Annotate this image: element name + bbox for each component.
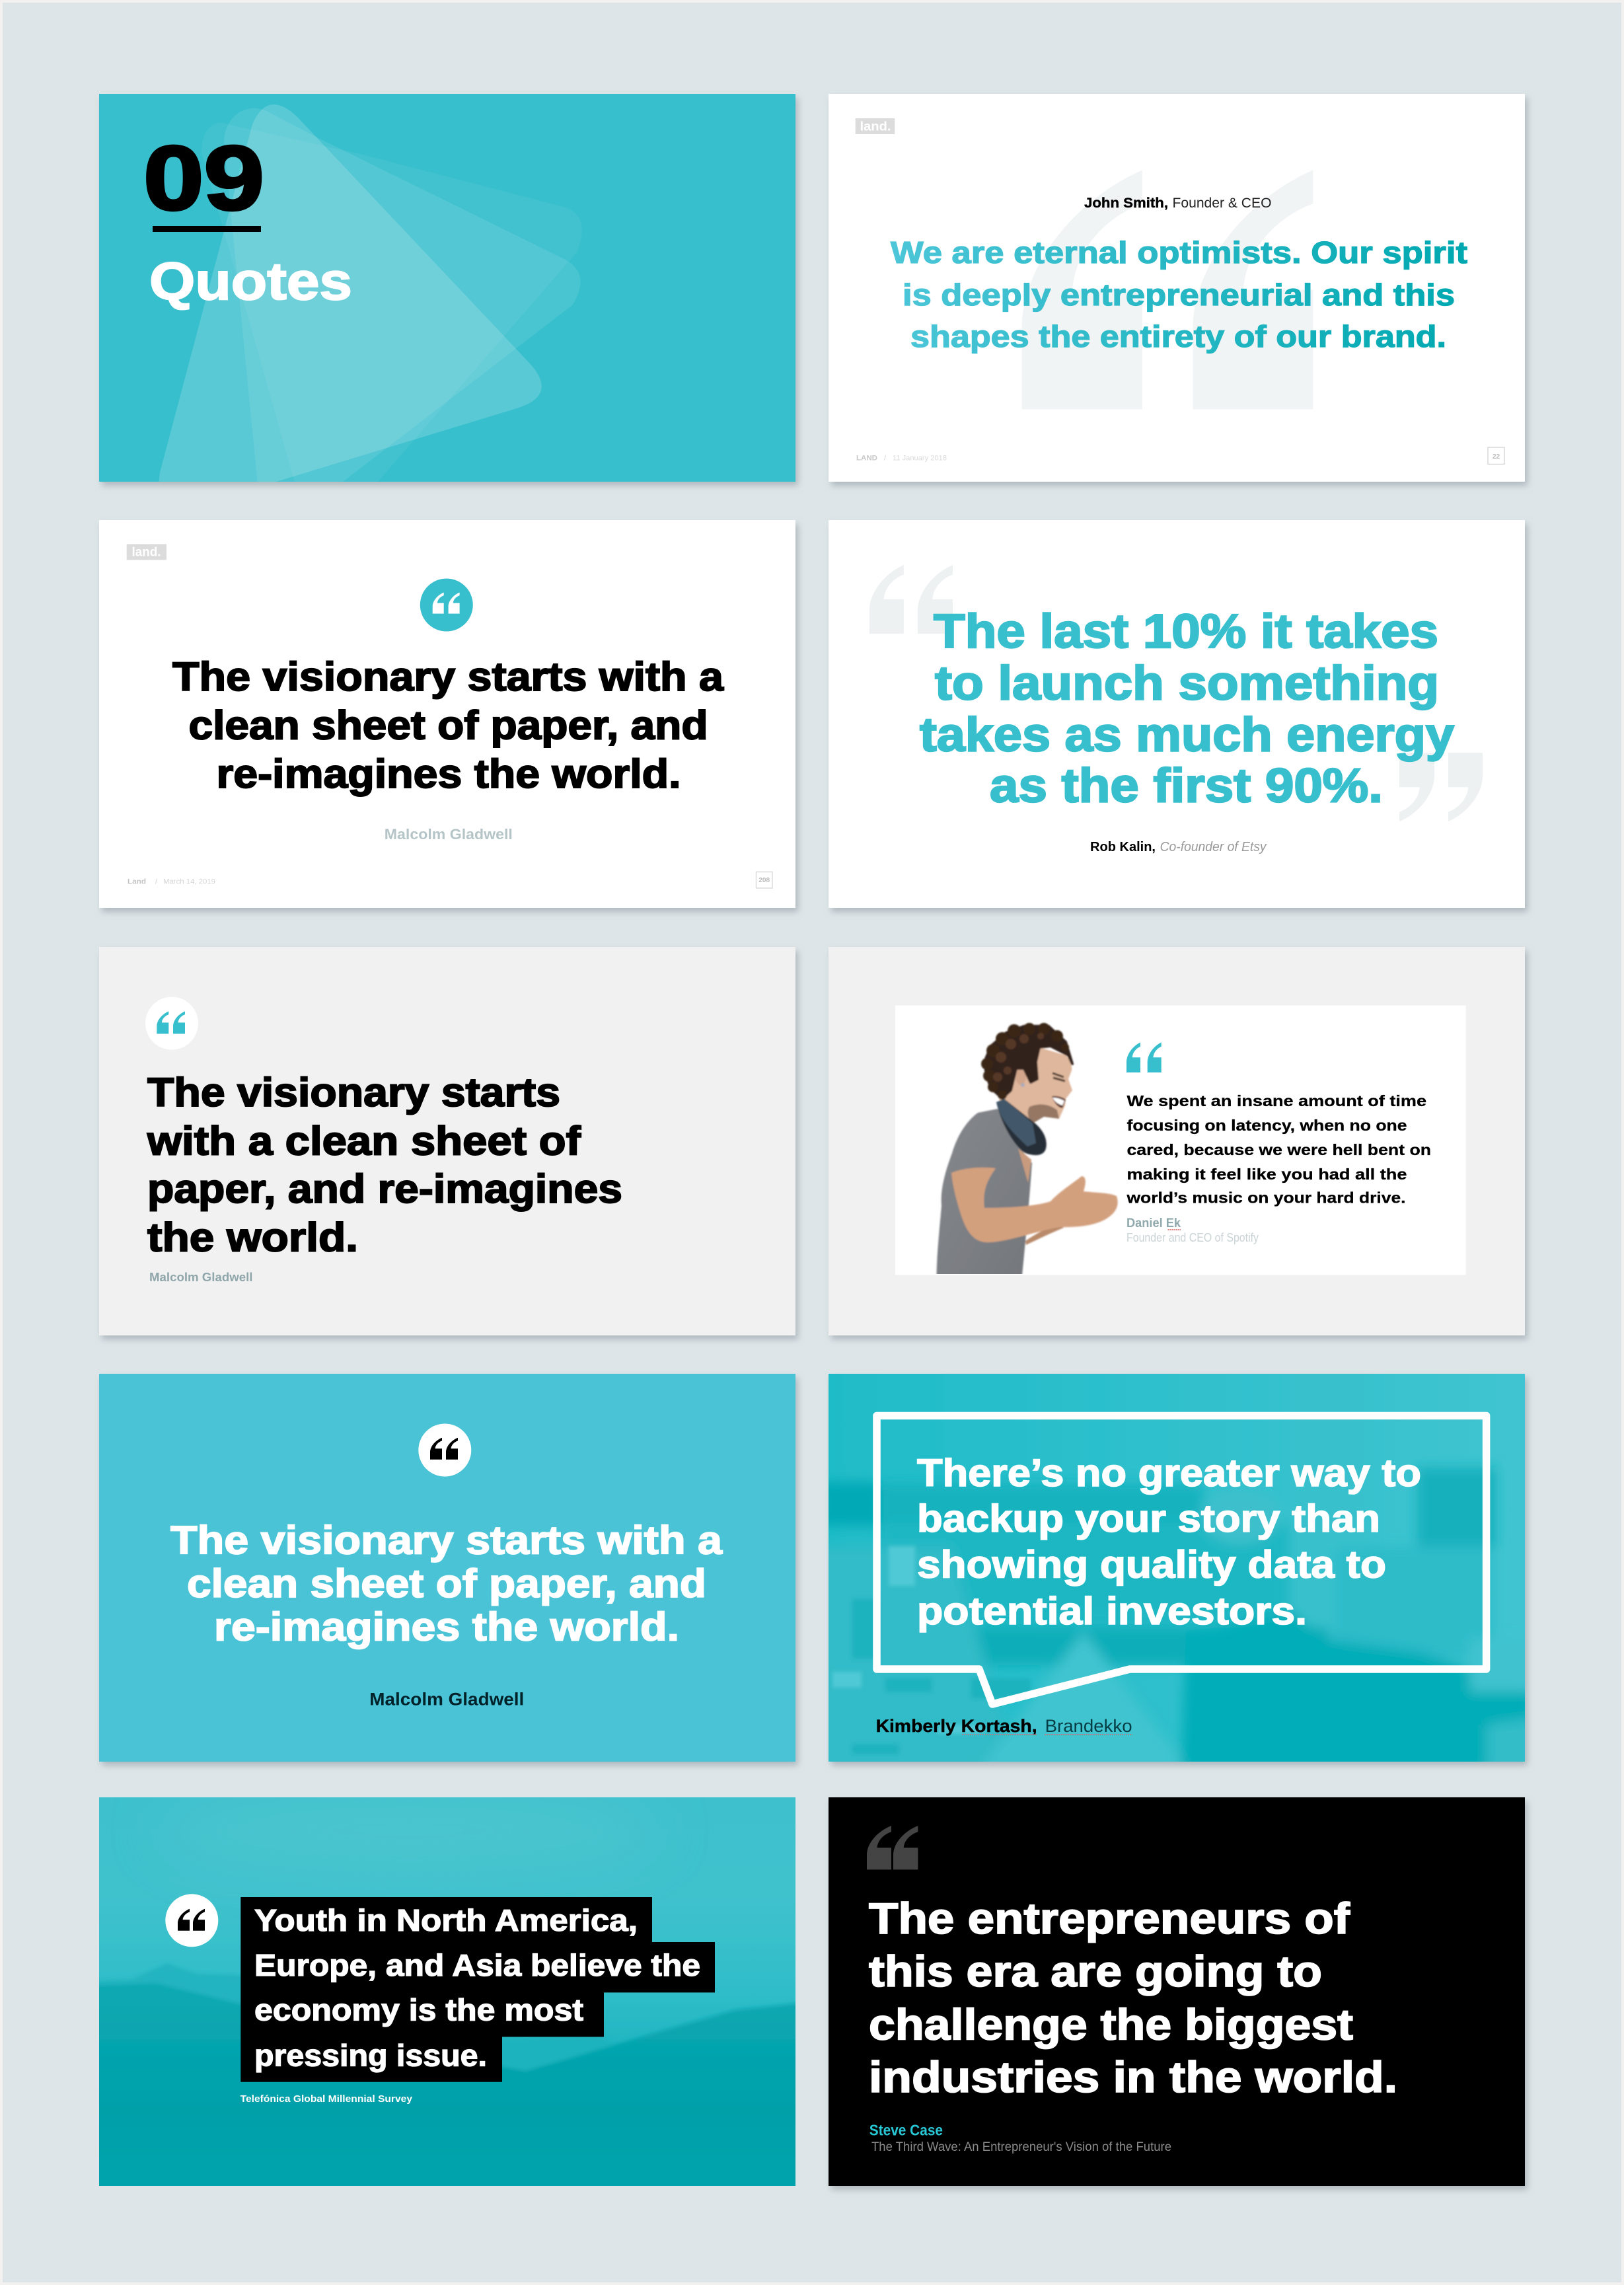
- logo: land.: [860, 120, 891, 133]
- highlighted quote text: [240, 1897, 715, 2082]
- attribution: Brandekko: [1045, 1716, 1132, 1736]
- quote text: The visionary starts with a: [170, 1518, 723, 1562]
- panel: Youth quote over mountains: [92, 1791, 802, 2194]
- quote text: potential investors.: [917, 1590, 1307, 1633]
- quote text: The last 10% it takes: [934, 605, 1438, 658]
- quote text: [917, 1452, 1421, 1633]
- panel: visionary quote on grey: [99, 947, 795, 1335]
- highlighted quote text: economy is the most: [254, 1993, 583, 2027]
- source: Telefónica Global Millennial Survey: [240, 2093, 413, 2105]
- panel: Steve Case quote on black: [829, 1797, 1525, 2186]
- quote text: world’s music on your hard drive.: [1126, 1189, 1406, 1207]
- quote text: [172, 654, 724, 796]
- quote text: clean sheet of paper, and: [189, 703, 708, 748]
- quote text: focusing on latency, when no one: [1127, 1117, 1407, 1134]
- quote text: industries in the world.: [869, 2052, 1397, 2101]
- panel: Kimberly Kortash quote over office photo: [819, 1361, 1533, 1771]
- speech bubble outline: [877, 1415, 1487, 1704]
- footer: LAND: [856, 455, 877, 463]
- highlighted quote text: Europe, and Asia believe the: [254, 1948, 700, 1982]
- attribution: Malcolm Gladwell: [369, 1689, 524, 1709]
- attribution: Rob Kalin,: [1090, 840, 1156, 854]
- icon: quote mark: [867, 1826, 918, 1869]
- closing quote mark: [1399, 753, 1483, 821]
- footer: 22: [1493, 453, 1500, 461]
- opening quote mark: [869, 565, 953, 634]
- icon: quote circle: [165, 1894, 218, 1947]
- panel: John Smith quote: [829, 94, 1525, 482]
- icon: quote circle: [145, 997, 198, 1050]
- quote text: [147, 1070, 622, 1259]
- quote text: to launch something: [935, 657, 1439, 710]
- quote text: this era are going to: [869, 1947, 1322, 1996]
- quote text: [869, 1894, 1397, 2101]
- attribution: [1084, 196, 1271, 211]
- footer: 11 January 2018: [893, 455, 947, 463]
- attribution: [876, 1716, 1132, 1736]
- panel: section cover 09 Quotes: [99, 94, 795, 486]
- quote text: the world.: [147, 1215, 358, 1259]
- quote text: [891, 235, 1467, 354]
- section number: 09: [143, 128, 264, 229]
- footer: [128, 872, 772, 888]
- attribution: The Third Wave: An Entrepreneur's Vision of the Future: [871, 2140, 1171, 2154]
- footer: /: [884, 455, 887, 463]
- attribution: [1090, 840, 1267, 854]
- panel: visionary quote on teal: [99, 1374, 795, 1762]
- quote text: We are eternal optimists. Our spirit: [891, 235, 1467, 270]
- footer: /: [155, 878, 158, 885]
- highlighted quote text: pressing issue.: [254, 2039, 487, 2073]
- quote text: [920, 605, 1454, 813]
- mountain photo tint: [92, 1791, 802, 2194]
- attribution: Founder & CEO: [1172, 196, 1271, 211]
- attribution: Malcolm Gladwell: [385, 826, 513, 843]
- attribution: [1126, 1217, 1259, 1244]
- panel: Daniel Ek quote with photo: [829, 947, 1525, 1335]
- quote text: re-imagines the world.: [214, 1605, 679, 1649]
- quote text: as the first 90%.: [990, 760, 1383, 813]
- quote text: cared, because we were hell bent on: [1127, 1141, 1431, 1158]
- logo: land.: [132, 546, 161, 559]
- quote text: challenge the biggest: [869, 2000, 1353, 2048]
- footer: 208: [758, 877, 770, 884]
- footer: [856, 447, 1504, 464]
- quote text: The entrepreneurs of: [869, 1894, 1350, 1943]
- icon: quote circle: [418, 1423, 471, 1476]
- attribution: Founder and CEO of Spotify: [1126, 1231, 1259, 1244]
- white quote card: [895, 1006, 1466, 1275]
- logo: [856, 118, 895, 134]
- attribution: [869, 2121, 1171, 2154]
- attribution: Daniel Ek: [1126, 1217, 1181, 1230]
- quote text: is deeply entrepreneurial and this: [903, 278, 1455, 312]
- logo: [127, 544, 166, 560]
- rounded triangle shapes: [159, 104, 582, 486]
- quote text: There’s no greater way to: [917, 1452, 1421, 1495]
- attribution: John Smith,: [1084, 196, 1168, 211]
- quote text: paper, and re-imagines: [147, 1166, 622, 1211]
- section title: Quotes: [149, 252, 352, 311]
- footer: March 14, 2019: [163, 878, 215, 885]
- quote text: The visionary starts with a: [172, 654, 724, 699]
- quote text: [1126, 1092, 1431, 1207]
- background quote mark: [1022, 170, 1313, 409]
- attribution: Co-founder of Etsy: [1160, 840, 1267, 854]
- attribution: Malcolm Gladwell: [149, 1271, 252, 1284]
- icon: quote mark: [1126, 1043, 1162, 1072]
- footer: Land: [128, 878, 146, 885]
- quote text: takes as much energy: [920, 708, 1454, 761]
- office photo tint: [829, 1462, 1525, 1762]
- number underline: [153, 226, 261, 232]
- icon: quote circle: [420, 579, 473, 632]
- quote text: backup your story than: [917, 1497, 1380, 1540]
- quote text: shapes the entirety of our brand.: [910, 319, 1446, 354]
- panel: Rob Kalin quote: [829, 520, 1525, 908]
- highlighted quote text: Youth in North America,: [254, 1903, 638, 1937]
- panel: visionary quote on white: [99, 520, 795, 908]
- quote text: We spent an insane amount of time: [1127, 1092, 1426, 1109]
- quote text: clean sheet of paper, and: [187, 1561, 706, 1606]
- quote text: re-imagines the world.: [217, 751, 681, 796]
- quote text: making it feel like you had all the: [1127, 1166, 1407, 1183]
- quote text: The visionary starts: [147, 1070, 560, 1115]
- quote text: [170, 1518, 723, 1649]
- attribution: Steve Case: [869, 2121, 943, 2138]
- quote text: showing quality data to: [917, 1543, 1386, 1586]
- attribution: Kimberly Kortash,: [876, 1716, 1037, 1736]
- photo: laughing man with headphones: [937, 1023, 1118, 1275]
- quote text: with a clean sheet of: [147, 1118, 581, 1163]
